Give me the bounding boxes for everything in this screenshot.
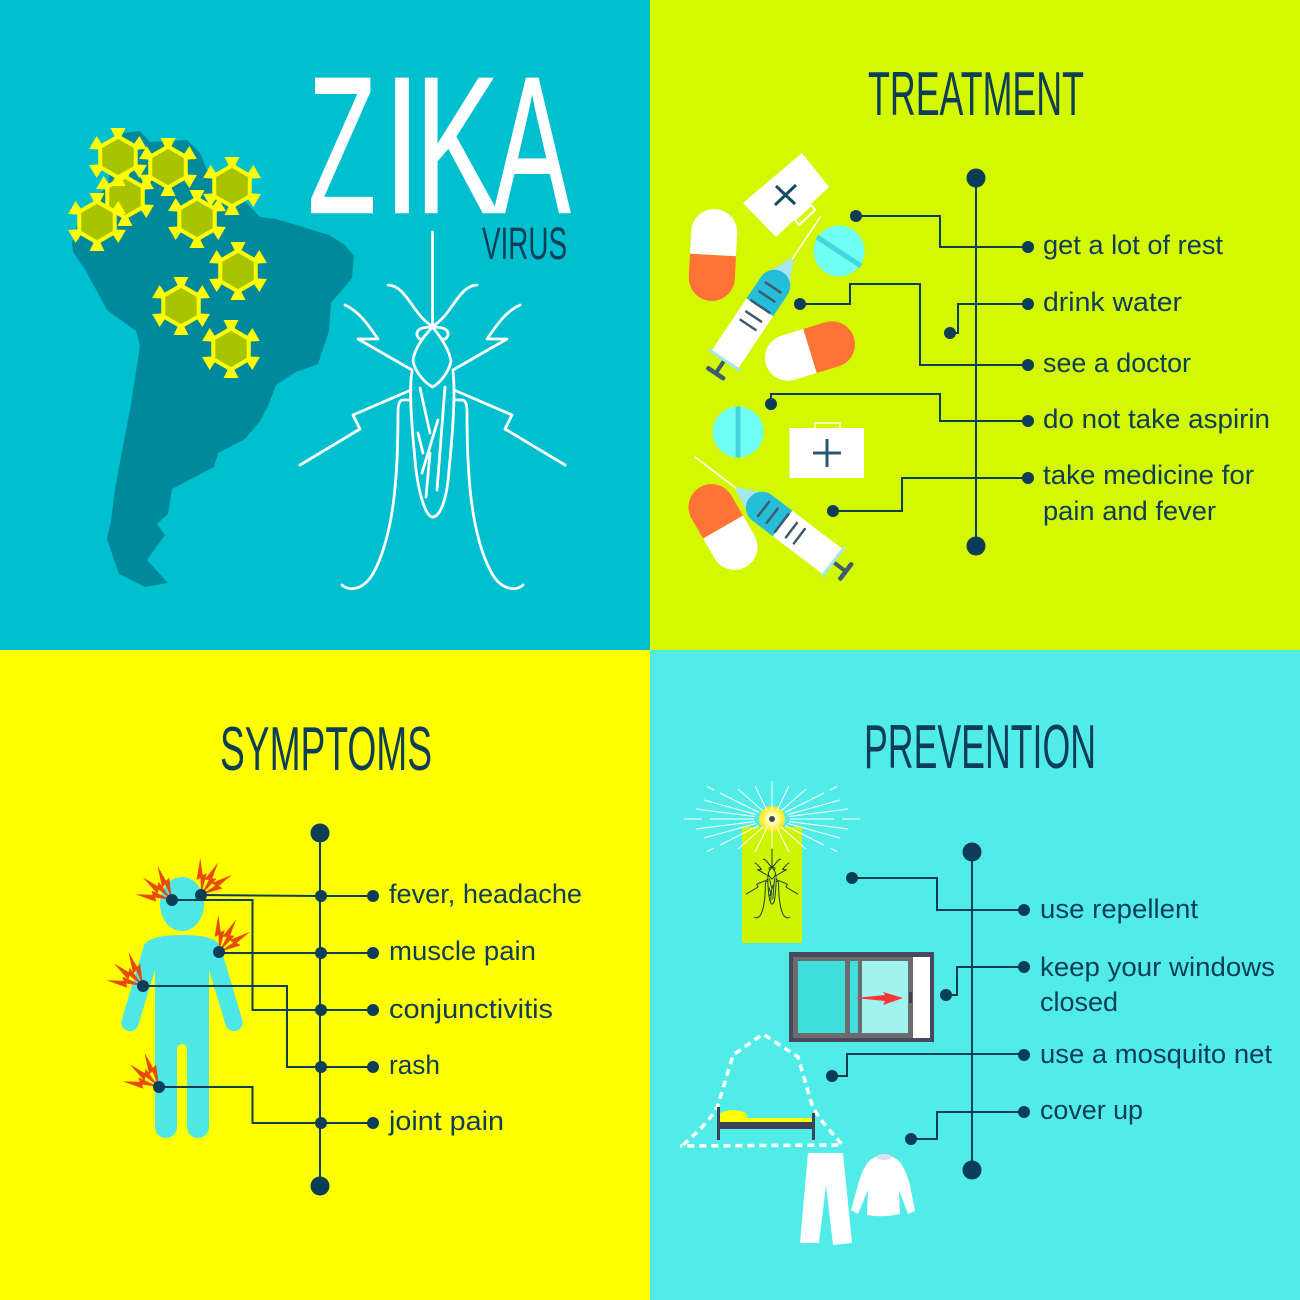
mosquito outline	[300, 232, 565, 589]
south america map	[72, 131, 354, 587]
connector: do not take aspirin	[765, 394, 1034, 427]
connector: keep windows closed	[940, 961, 1030, 1001]
panel: prevention	[650, 650, 1300, 1300]
icon: bed under mosquito net	[680, 1034, 842, 1146]
heading: prevention: PREVENTION	[864, 713, 1096, 782]
panel: zika overview	[0, 0, 650, 650]
prevention list	[1040, 894, 1275, 1125]
title: ZIKA: A	[494, 36, 570, 254]
treatment list: get a lot of rest	[1043, 230, 1223, 260]
icon: first aid kit	[790, 423, 864, 478]
connector: muscle pain	[213, 946, 379, 959]
connector chart: symptoms	[137, 824, 379, 1196]
connector: use repellent	[846, 872, 1030, 916]
heading: symptoms: SYMPTOMS	[220, 715, 432, 784]
connector: fever, headache	[195, 889, 379, 902]
icon: capsule	[680, 476, 766, 578]
connector: cover up	[905, 1106, 1030, 1145]
virus particles on map	[68, 128, 267, 378]
title: ZIKA: I	[383, 36, 421, 254]
pain bursts	[98, 847, 254, 1103]
title: ZIKA: Z	[308, 36, 376, 254]
symptoms list: muscle pain	[389, 936, 536, 966]
title: ZIKA: K	[415, 36, 499, 254]
prevention list: use a mosquito net	[1040, 1039, 1272, 1069]
panel: symptoms	[0, 650, 650, 1300]
treatment list: drink water	[1043, 287, 1182, 317]
symptoms list: conjunctivitis	[389, 994, 553, 1024]
icon: syringe	[684, 442, 859, 588]
connector: joint pain	[153, 1081, 379, 1129]
treatment list: see a doctor	[1043, 348, 1191, 378]
icon: syringe	[699, 205, 837, 386]
icon: round pill	[814, 226, 864, 276]
icon: capsule	[759, 316, 861, 386]
prevention list: cover up	[1040, 1095, 1143, 1125]
icon: capsule	[688, 208, 738, 302]
connector: mosquito net	[826, 1049, 1030, 1082]
symptoms list: rash	[389, 1050, 440, 1080]
connector: rash	[137, 980, 379, 1073]
icon: clothes	[800, 1153, 915, 1245]
icon: round pill	[712, 406, 764, 458]
treatment list: take medicine for	[1043, 460, 1254, 490]
prevention list: use repellent	[1040, 894, 1199, 924]
connector chart: prevention	[826, 842, 1030, 1180]
connector: take medicine	[827, 472, 1034, 517]
subtitle: VIRUS: VIRUS	[482, 218, 567, 269]
treatment list: do not take aspirin	[1043, 404, 1270, 434]
icon: repellent	[684, 781, 860, 943]
icon: first aid kit tilted	[743, 153, 829, 237]
icon: window	[789, 952, 934, 1042]
heading: treatment: TREATMENT	[868, 60, 1084, 129]
symptoms list	[388, 879, 582, 1136]
prevention list: keep your windows	[1040, 952, 1275, 982]
symptoms list: joint pain	[388, 1106, 504, 1136]
connector chart: treatment	[765, 168, 1034, 556]
symptoms list: fever, headache	[389, 879, 582, 909]
panel: treatment	[650, 0, 1300, 650]
connector: drink water	[944, 298, 1034, 339]
connector: conjunctivitis	[166, 894, 379, 1016]
human figure	[121, 877, 243, 1138]
connector: see a doctor	[794, 284, 1034, 371]
title: ZIKA	[308, 36, 570, 254]
treatment list	[1043, 230, 1270, 526]
connector: get a lot of rest	[850, 210, 1034, 253]
prevention list: closed	[1040, 987, 1118, 1017]
treatment list: pain and fever	[1043, 496, 1216, 526]
